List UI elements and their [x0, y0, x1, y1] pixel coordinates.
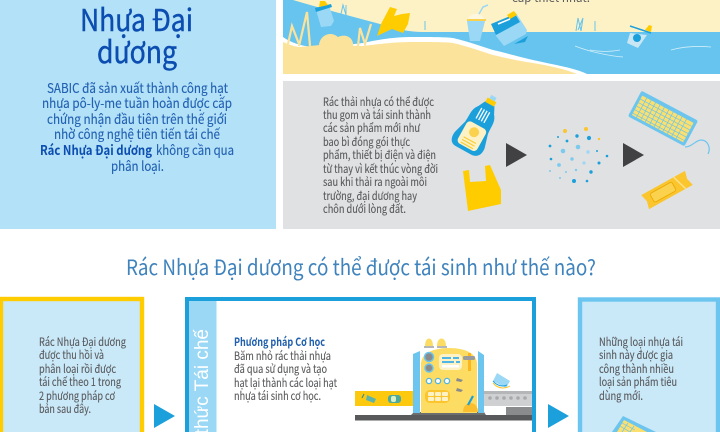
text: step 1: phân loại rồi được	[39, 361, 116, 377]
text: recycling description: phẩm, thiết bị điện và điện	[323, 147, 436, 163]
arrow	[506, 143, 527, 167]
heading: Rác Nhựa Đại dương có thể được tái sinh như thế nào?	[126, 251, 596, 282]
illustration: recycling machine	[355, 338, 532, 420]
text: mechanical method: nhựa tái sinh cơ học.	[234, 388, 321, 404]
text: mechanical method: Phương pháp Cơ học	[234, 334, 325, 350]
text: step 3	[599, 334, 683, 404]
text: step 3: loại sản phẩm tiêu	[599, 374, 677, 390]
title	[80, 0, 193, 72]
icon: detergent bottle	[449, 88, 509, 159]
vertical label: thức Tái chế	[192, 329, 213, 432]
conveyor out	[484, 391, 532, 415]
text: step 3: Những loại nhựa tái	[599, 334, 683, 350]
intro text	[40, 78, 234, 175]
text: step 3: dùng mới.	[599, 388, 643, 404]
icon: yellow bag	[463, 165, 501, 211]
text: mechanical method: hạt lại thành các loại hạt	[234, 375, 338, 391]
pellets	[549, 127, 608, 183]
arrow	[548, 404, 569, 428]
title: dương	[97, 28, 177, 72]
panel: step 3 new products	[580, 300, 718, 432]
text: step 1: tái chế theo 1 trong	[39, 374, 121, 390]
arrow	[154, 404, 175, 428]
text: step 3: sinh này được gia	[599, 347, 673, 363]
icon: snack bar	[641, 171, 693, 209]
text: recycling description: trường, đại dương hay	[323, 188, 417, 204]
text: step 1	[39, 334, 126, 417]
icon: floating bottle	[627, 25, 652, 48]
intro text: Rác Nhựa Đại dương	[40, 140, 152, 159]
text: step 3: công thành nhiều	[599, 361, 674, 377]
text: step 1: 2 phương pháp cơ	[39, 388, 115, 404]
machine	[411, 338, 486, 415]
text: recycling description: sau khi thải ra ngoài môi	[323, 174, 427, 190]
intro text: SABIC đã sản xuất thành công hạt	[47, 78, 228, 97]
intro text: chứng nhận đầu tiên trên thế giới	[47, 109, 227, 128]
text: mechanical method	[234, 334, 338, 404]
panel: recycling methods	[187, 299, 534, 432]
arrow	[623, 143, 644, 167]
icon: jerry can	[491, 11, 528, 46]
recycled flakes	[493, 373, 510, 388]
intro text: phân loại.	[111, 156, 164, 175]
text: mechanical method: Băm nhỏ rác thải nhựa	[234, 348, 331, 364]
text: recycling description: từ thay vì kết thúc vòng đời	[323, 161, 438, 177]
icon: keyboard	[628, 91, 709, 154]
text: step 1: Rác Nhựa Đại dương	[39, 334, 126, 350]
text: recycling description: Rác thải nhựa có thể được	[323, 94, 434, 110]
icon: keyboard fragment	[612, 416, 656, 432]
text: recycling description: thu gom và tái sinh thành	[323, 107, 431, 123]
icon: cup	[467, 5, 488, 41]
panel: beach scene	[283, 0, 720, 74]
panel: intro	[0, 0, 276, 229]
intro text: nhựa pô-ly-me tuần hoàn được cấp	[42, 93, 232, 112]
text: recycling description: các sản phẩm mới như	[323, 120, 421, 136]
panel: recycling loop	[283, 81, 720, 229]
icon: plastic bag	[377, 7, 410, 36]
text: recycling description	[323, 94, 438, 217]
text: recycling description: chôn dưới lòng đất.	[323, 201, 406, 217]
conveyor in	[355, 391, 413, 406]
text: step 1: bản sau đây.	[39, 401, 91, 417]
text: mechanical method: đã qua sử dụng và tạo	[234, 361, 327, 377]
text: recycling description: bao bì đóng gói thực	[323, 134, 410, 150]
panel: step 1 collection	[1, 299, 142, 432]
intro text: không cần qua	[156, 140, 234, 159]
text: step 1: được thu hồi và	[39, 347, 104, 363]
icon: baby bottle	[315, 1, 334, 27]
intro text: nhờ công nghệ tiên tiến tái chế	[54, 124, 221, 143]
